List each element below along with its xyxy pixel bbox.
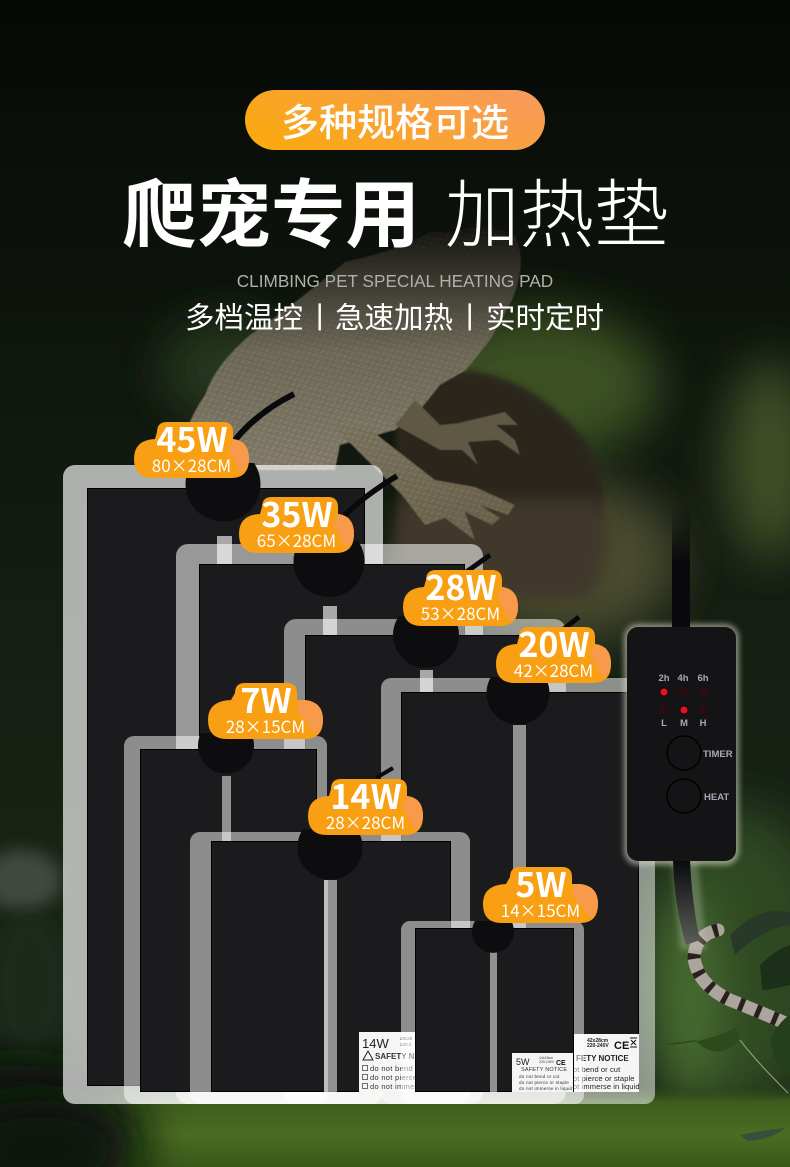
badge: 20W: 42×28CM	[514, 657, 593, 682]
controller: M	[680, 718, 688, 729]
controller: H	[700, 718, 707, 729]
label: 14W safety notice: 14W	[362, 1036, 389, 1051]
badge: 7W	[208, 674, 323, 739]
tail	[694, 930, 790, 1025]
feature line: 丨	[455, 295, 485, 337]
badge: 20W	[496, 618, 611, 683]
badge: 45W	[134, 413, 249, 478]
controller: L	[661, 718, 667, 729]
badge: 35W: 35W	[261, 488, 333, 537]
badge: 35W	[239, 488, 354, 553]
badge: 14W	[308, 770, 423, 835]
English subtitle: CLIMBING PET SPECIAL HEATING PAD	[237, 271, 553, 291]
badge: 45W: 45W	[156, 413, 228, 462]
badge: 5W: 14×15CM	[501, 897, 580, 922]
badge: 7W: 28×15CM	[226, 713, 305, 738]
controller: 4h	[677, 673, 689, 684]
badge: 45W: 80×28CM	[152, 452, 231, 477]
label: 14W safety notice	[359, 1032, 420, 1092]
label: 5W safety notice: do not pierce or staple	[519, 1080, 569, 1085]
label: 14W safety notice: 220-2	[400, 1042, 412, 1047]
feature line: 丨	[305, 295, 335, 337]
label: 20W safety notice	[572, 1034, 640, 1092]
feature line: 实时定时	[486, 295, 604, 337]
front leg	[337, 424, 515, 540]
label: 5W safety notice: do not bend or cut	[519, 1074, 560, 1079]
controller: 2h	[658, 673, 670, 684]
label: 5W safety notice: 5W	[516, 1057, 530, 1067]
label: 14W safety notice: 28x28	[400, 1036, 413, 1041]
pill heading: 多种规格可选	[281, 92, 509, 147]
label: 5W safety notice: do not immerse in liquid	[519, 1086, 573, 1091]
badge: 28W: 28W	[425, 561, 497, 610]
label: 14W safety notice: do not pierce	[370, 1073, 417, 1082]
title	[122, 156, 669, 263]
label: 5W safety notice: 14x15cm	[539, 1056, 553, 1060]
badge: 14W: 14W	[330, 770, 402, 819]
label: 14W safety notice: do not immer	[370, 1082, 418, 1091]
badge: 5W: 5W	[515, 858, 567, 907]
cable to controller	[672, 505, 690, 630]
pad: 5W	[401, 921, 584, 1104]
badge: 14W: 28×28CM	[326, 809, 405, 834]
label: 20W safety notice: CE	[614, 1040, 629, 1052]
badge: 28W	[403, 561, 518, 626]
pill heading	[245, 90, 545, 150]
label: 20W safety notice: ot immerse in liquid	[573, 1082, 640, 1091]
title: 爬宠专用	[122, 156, 420, 263]
label: 20W safety notice: FETY NOTICE	[576, 1054, 629, 1063]
label: 5W safety notice	[512, 1053, 573, 1092]
controller glow	[624, 624, 739, 865]
title: 加热垫	[445, 156, 669, 263]
controller: 6h	[697, 673, 709, 684]
grass floor	[0, 1085, 790, 1167]
pad: 14W	[190, 768, 470, 1104]
pad: 7W	[124, 733, 327, 1104]
controller	[627, 627, 736, 861]
label: 5W safety notice: CE	[556, 1060, 566, 1067]
forest glow	[420, 310, 660, 460]
badge: 20W: 20W	[518, 618, 590, 667]
label: 5W safety notice: 220-240V	[539, 1060, 555, 1064]
label: 20W safety notice: 42x28cm	[587, 1038, 609, 1044]
badge: 7W: 7W	[240, 674, 292, 723]
controller: TIMER	[703, 749, 733, 760]
label: 5W safety notice: SAFETY NOTICE	[521, 1067, 567, 1073]
label: 14W safety notice: SAFETY N	[375, 1052, 415, 1061]
jungle leaves right	[730, 911, 790, 955]
pad: 45W	[63, 394, 383, 1104]
feature line: 急速加热	[335, 295, 453, 337]
label: 20W safety notice: 220-240V	[587, 1043, 609, 1049]
lizard body	[180, 228, 521, 540]
badge: 5W	[483, 858, 598, 923]
feature line	[185, 295, 604, 337]
badge: 35W: 65×28CM	[257, 527, 336, 552]
pad: 20W	[381, 617, 655, 1104]
pad: 35W	[176, 476, 483, 1104]
label: 20W safety notice: ot bend or cut	[573, 1065, 621, 1074]
label: 20W safety notice: ot pierce or staple	[573, 1074, 635, 1083]
controller: HEAT	[704, 792, 729, 803]
rock	[395, 371, 603, 540]
pad: 28W	[284, 555, 566, 1104]
feature line: 多档温控	[185, 295, 303, 337]
back leg	[395, 400, 520, 465]
badge: 28W: 53×28CM	[421, 600, 500, 625]
label: 14W safety notice: do not bend o	[370, 1064, 420, 1073]
